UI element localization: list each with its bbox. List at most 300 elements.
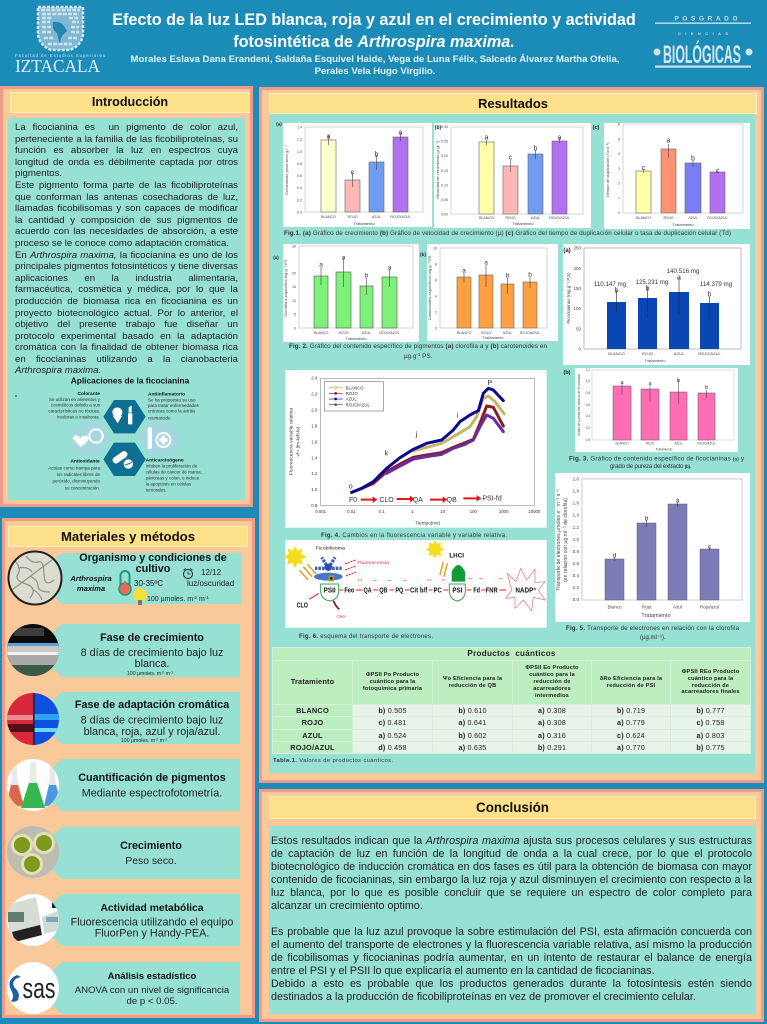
chart: Fig 5 electron transport: [555, 473, 750, 622]
axes: 1.0: [311, 487, 318, 492]
axes: 1000: [499, 509, 509, 514]
text: anticarcinógeno: Anticarcinógeno: [146, 458, 184, 464]
step: Fase de crecimiento: m: [164, 671, 170, 677]
authors: [131, 54, 619, 77]
diagram: Fig 6 electron transport: [283, 540, 547, 628]
step: Fase de adaptación cromática: Fase de adaptación cromática: [75, 699, 230, 711]
chart: Fig 5 electron transport: Transporte de electrones µmoles e⁻ m⁻² s⁻¹: [556, 489, 562, 591]
step: Actividad metabólica: Actividad metabólica: [100, 903, 204, 914]
chart: Fig 2a chlorophyll: b: [365, 272, 369, 280]
table: quantum products: b) 0.505: [378, 706, 407, 715]
chart: Fig 1b growth rate: 0.25: [441, 140, 448, 144]
panel: Conclusión: [259, 789, 764, 1022]
chart: Fig 3a phycocyanin: b: [615, 288, 619, 294]
step: Fase de crecimiento: -1: [170, 670, 173, 674]
text: anticarcinógeno: tumorales.: [146, 488, 167, 493]
chart: Fig 1a growth: Crecimiento peso seco g·l⁻¹: [284, 144, 289, 195]
table: quantum products: ROJO: [302, 718, 323, 727]
electron chain labels: QB: [379, 587, 387, 594]
red arrows: [309, 560, 506, 609]
electron chain labels: FNR: [486, 587, 498, 594]
panel: Materiales y métodos: [2, 518, 255, 1018]
chart: Fig 2a chlorophyll: BLANCO: [314, 331, 329, 335]
chart: Fig 5 electron transport: 0.4: [573, 573, 579, 578]
chart: Fig 2a chlorophyll: AZUL: [362, 331, 371, 335]
teal body: [269, 114, 755, 773]
step: Organismo y condiciones de cultivo: cultivo: [136, 563, 171, 575]
step: Cuantificación de pigmentos: Mediante espectrofotometría.: [82, 788, 222, 800]
table: quantum products: b) 0.719: [617, 706, 645, 715]
bars: [636, 144, 725, 213]
text: anticarcinógeno: páncreas y colon, e induce: [146, 476, 200, 481]
chart: Fig 2a chlorophyll: Clorofila a específica mg.g⁻¹ PS: [283, 259, 288, 317]
axes: Fluorescencia variable relativa: [289, 408, 295, 475]
table: quantum products: b) 0.610: [458, 706, 487, 715]
chart: Fig 5 electron transport: a: [676, 498, 680, 504]
heading: Conclusión: Conclusión: [476, 800, 549, 815]
logo: SAS: sas: [22, 973, 56, 1005]
text: antioxidante: su concentración.: [65, 485, 100, 490]
OJIP labels and sequence: [349, 378, 502, 504]
table: quantum products: reducción de: [533, 679, 571, 685]
chart: Fig 3a phycocyanin: Tratamiento: [644, 358, 666, 363]
PSII: PSII: [324, 587, 336, 594]
heading: Materiales y métodos: [8, 526, 248, 547]
chart: Fig 1a growth: ROJO/AZUL: [390, 215, 411, 219]
bars: [479, 138, 567, 214]
step: Organismo y condiciones de cultivo: m: [197, 596, 205, 603]
chart: Fig 1c doubling time: c: [642, 165, 646, 172]
chart: Fig 1c doubling time: c: [716, 168, 720, 175]
text: introduction: La ficocianina es un pigmento de color azul,: [15, 122, 238, 133]
chart: Fig 3b purity: Grado de pureza del extracto de ficocianina: [577, 374, 581, 436]
step: Organismo y condiciones de cultivo: 100 µmoles. m: [147, 596, 193, 603]
text: antiinflamatorio: crónicas como la artritis: [148, 409, 196, 414]
authors: Perales Vela Hugo Virgilio.: [315, 66, 435, 77]
table: quantum products: a) 0.524: [378, 731, 406, 740]
chart: Fig 1b growth rate: b: [534, 146, 538, 152]
OJIP labels and sequence: i: [457, 410, 459, 419]
step: Organismo y condiciones de cultivo: 30-35ºC: [134, 579, 163, 588]
chart: Fig 1c doubling time: AZUL: [688, 216, 698, 220]
chart: Fig 2a chlorophyll: a: [342, 254, 346, 262]
axes: vf = (fm-fo/ft-fo): [296, 426, 301, 457]
text: colorante: cosméticos debido a sus: [51, 403, 101, 408]
chart: Fig 1c doubling time: 4: [618, 152, 620, 156]
caption: Tabla 1: Tabla.1. Valores de productos cuánticos.: [273, 758, 393, 764]
chart: Fig 1b growth rate: [434, 123, 591, 228]
chart: Fig 3b purity: BLANCO: [615, 442, 629, 446]
chart: Fig 2a chlorophyll: 30: [292, 244, 296, 248]
chart: Fig 2a chlorophyll: 0: [294, 326, 296, 330]
chart: Fig 1a growth: 0.8: [297, 162, 302, 166]
table: quantum products: d) 0.458: [378, 743, 407, 752]
step: Actividad metabólica: Fluorescencia utilizando el equipo: [71, 916, 233, 928]
step: Fase de crecimiento: [5, 622, 240, 678]
table: quantum products: cuántico para la: [370, 679, 415, 685]
chart: Fig 1b growth rate: BLANCO: [479, 216, 494, 220]
axes: 0.01: [347, 509, 356, 514]
heading: Resultados: [269, 93, 757, 114]
step: Fase de adaptación cromática: m: [158, 738, 164, 744]
chart: Fig 3a phycocyanin: ROJO/AZUL: [698, 351, 721, 356]
photo: filters with biomass: [7, 826, 59, 878]
chart: Fig 3a phycocyanin: BLANCO: [608, 351, 625, 356]
text: introduction: pigmentos.: [15, 168, 62, 179]
bars: [457, 265, 537, 328]
heading: Resultados: Resultados: [478, 96, 548, 111]
chart: Fig 5 electron transport: 1.4: [573, 513, 579, 518]
title: [112, 11, 636, 51]
chart: Fig 1a growth: Tratamiento: [353, 221, 375, 226]
step: Fase de adaptación cromática: -1: [164, 738, 167, 742]
caption: Fig 3: grado de pureza del extracto (b).: [610, 463, 691, 470]
chart: Fig 5 electron transport: c: [708, 544, 712, 550]
electron chain labels: Cit b/f: [410, 587, 428, 594]
hexagon: colorant: [103, 400, 146, 433]
table: quantum products: b) 0.775: [696, 743, 725, 752]
icon: suns: [283, 540, 447, 580]
text: introduction: protocolo experimental basado en la adaptación: [15, 331, 238, 342]
step: Fase de crecimiento: -2: [161, 670, 164, 674]
step: Fase de adaptación cromática: blanca, roja, azul y roja/azul.: [84, 726, 220, 738]
step: Crecimiento: Crecimiento: [120, 840, 182, 852]
chart: Fig 3a phycocyanin: 114.379 mg: [700, 281, 733, 288]
axes: 1.6: [311, 439, 318, 444]
caption: Fig 2: µg.g: [404, 353, 416, 360]
electron chain labels: PQ: [395, 587, 404, 594]
bars: [605, 502, 719, 600]
OJIP labels and sequence: o: [349, 481, 353, 490]
text: conclusion: luz blanca, por lo que es posible concluir que se requiere un espectro de color completo para: [271, 887, 752, 899]
chart: Fig 2b carotenoids: [420, 244, 558, 341]
chart: Fig 1b growth rate: AZUL: [531, 216, 540, 220]
chart: Fig 2b carotenoids: b: [528, 272, 532, 278]
teal body: [8, 118, 245, 500]
text: conclusion: alcanzar un crecimiento optimo.: [271, 900, 423, 912]
table: quantum products: reducción de QB: [449, 682, 496, 688]
chart: Fig 5 electron transport: 1.8: [573, 489, 579, 494]
table: quantum products: b) 0.291: [538, 743, 566, 752]
step: Fase de crecimiento: 8 días de crecimiento bajo luz: [81, 647, 223, 659]
step: Fase de adaptación cromática: 100 µmoles. m: [121, 738, 155, 744]
hexagon: anticancer: [103, 443, 146, 476]
chart: Fig 3b purity: ROJO/AZUL: [698, 442, 716, 446]
step: Fase de crecimiento: 100 µmoles. m: [127, 671, 161, 677]
chart: Fig 3b purity: [563, 368, 738, 452]
chart: Fig 2b carotenoids: a: [484, 260, 488, 266]
chart: Fig 1a growth: c: [351, 170, 355, 176]
table: quantum products: ΦPSII REo Producto: [682, 669, 739, 675]
chart: Fig 3b purity: 1.2: [586, 368, 590, 372]
table: quantum products: cuántico para la: [688, 676, 733, 682]
charts and figures: [273, 122, 750, 764]
chart: Fig 3a phycocyanin: 0: [578, 346, 581, 352]
text: conclusion: contenido de ficocianinas, sin embargo la luz roja y azul disminuyen el crecimiento con respecto a la: [271, 874, 752, 886]
heading: Materiales y métodos: Materiales y métodos: [61, 529, 195, 544]
chart: Fig 3b purity: 0.8: [586, 391, 590, 395]
text: introduction: acuerdo con las necesidades de absorción, a este: [15, 226, 238, 237]
chart: Fig 2a chlorophyll: a: [388, 264, 392, 272]
step: Organismo y condiciones de cultivo: Organismo y condiciones de: [79, 552, 227, 564]
chart: Fig 2b carotenoids: 0: [435, 326, 437, 330]
text: conclusion: Estos resultados indican que la Arthrospira maxima ajusta sus procesos celulares y sus estructuras: [271, 835, 752, 847]
table: quantum products: c) 0.481: [378, 718, 406, 727]
chart: Fig 2a chlorophyll: 10: [292, 299, 296, 303]
OJIP labels and sequence: QB: [447, 497, 457, 504]
OJIP labels and sequence: P: [487, 378, 492, 387]
text: antioxidante: peróxido, disminuyendo: [52, 479, 100, 484]
chart: Fig 1c doubling time: 6: [618, 122, 620, 126]
axes: 2.4: [311, 376, 318, 381]
text: introduction: llamadas ficobilisomas y son capaces de modificar: [15, 203, 238, 214]
chart: Fig 2a chlorophyll: ROJO/AZUL: [379, 331, 400, 335]
bars: [314, 258, 397, 328]
chart: Fig 5 electron transport: Blanco: [607, 604, 622, 610]
chart: Fig 3a phycocyanin: 110.147 mg: [594, 281, 627, 288]
chart: Fig 5 electron transport: d: [613, 552, 617, 560]
chart: Fig 3b purity: Tratamiento: [656, 448, 673, 452]
text: conclusion: entre el PSI y el PSII lo que explicaría el aumento en la cantidad de ficocianinas.: [271, 965, 655, 977]
text: introduction: longitud de onda es débilmente captada por otros: [15, 157, 238, 168]
chart: Fig 1b growth rate: 0.30: [441, 125, 448, 129]
chart: Fig 1b growth rate: ROJO: [506, 216, 516, 220]
icon: thermometer: [119, 571, 131, 595]
axes: Tiempo(ms): [415, 520, 440, 525]
text: conclusion: Debido a esto es probable que los productos generados durante la fotosíntesis estén siendo: [271, 978, 752, 990]
table: quantum products: fotoquímica primaria: [363, 686, 422, 692]
text: introduction: farmacéutica, cosmética y médica, por lo que la: [15, 284, 238, 295]
chart: Fig 3a phycocyanin: 50: [576, 326, 581, 331]
legend: ROJO/AZUL: [346, 402, 371, 407]
chart: Fig 3a phycocyanin: 100: [573, 306, 581, 311]
chart: Fig 1a growth: BLANCO: [321, 215, 336, 219]
PSI and LHCI: [449, 552, 465, 601]
table: quantum products: acarreadores finales: [681, 689, 740, 695]
chart: Fig 2a chlorophyll: 20: [292, 272, 296, 276]
table: quantum products: δRo Eficiencia para la: [600, 676, 662, 682]
axes: 0.001: [315, 509, 327, 514]
table: quantum products: a) 0.641: [458, 718, 486, 727]
chart: Fig 1b growth rate: Tratamiento: [512, 221, 534, 226]
caption: Fig 2: [289, 343, 547, 360]
chart: Fig 3a phycocyanin: b: [708, 292, 712, 298]
diagram: Fig 6 electron transport: CLO: [297, 602, 308, 609]
caption: Fig 2: Fig. 2. Gráfico del contenido específico de pigmentos (a) clorofila a y (b) carotenoides en: [289, 343, 547, 350]
logo: SAS: [7, 962, 59, 1014]
chart: Fig 1c doubling time: 2: [618, 182, 620, 186]
caption: Fig 2: PS.: [420, 353, 433, 360]
text: anticarcinógeno: [146, 458, 202, 493]
text: colorante: [48, 391, 101, 420]
text: antioxidante: [48, 459, 100, 490]
chart: Fig 1a growth: [276, 122, 432, 227]
panel: Resultados: [259, 87, 764, 783]
chart: Fig 3a phycocyanin: (a): [563, 248, 571, 254]
step: Organismo y condiciones de cultivo: -1: [205, 595, 209, 600]
caption: Fig 4: Fig. 4. Cambios en la fluorescencia variable y variable relativa.: [321, 533, 507, 539]
authors: Morales Eslava Dana Erandeni, Saldaña Esquivel Haide, Vega de Luna Félix, Salcedo Álvarez Martha Ofelia,: [131, 54, 619, 65]
chart: Fig 1a growth: 0.4: [297, 186, 302, 190]
legend: BLANCO: [346, 385, 364, 390]
icon: light bulb: [133, 588, 147, 605]
photo: microscope: [10, 552, 60, 604]
table: quantum products: c) 0.624: [617, 731, 645, 740]
step: Organismo y condiciones de cultivo: 12/12: [201, 568, 222, 577]
chart: Fig 2b carotenoids: a: [462, 268, 466, 274]
chart: Fig 5 electron transport: 2.0: [573, 476, 579, 482]
chart: Fig 5 electron transport: 1.6: [573, 501, 579, 506]
curves: [352, 388, 504, 492]
text: antiinflamatorio: para tratar enfermedades: [148, 403, 200, 408]
table: quantum products: a) 0.308: [538, 706, 566, 715]
chart: Fig 1a growth: (a): [276, 122, 282, 126]
axes: 2.0: [311, 407, 318, 412]
chart: Fig 2b carotenoids: (b): [420, 252, 426, 257]
chart: Fig 3a phycocyanin: ROJO: [642, 351, 653, 356]
text: anticarcinógeno: Inhiben la proliferación de: [146, 464, 198, 469]
chart: Fig 3a phycocyanin: b: [646, 286, 650, 292]
axes: 0.8: [311, 503, 318, 508]
logo: UNAM Iztacala: [15, 6, 105, 74]
photo: red and blue light: [7, 693, 59, 745]
heading: Conclusión: [269, 796, 756, 819]
chart: Fig 3b purity: b: [705, 385, 708, 391]
title: Efecto de la luz LED blanca, roja y azul en el crecimiento y actividad: [112, 11, 636, 29]
text: colorante: inodoras e insaboras.: [57, 415, 100, 420]
chart: Fig 2a chlorophyll: ROJO: [339, 331, 349, 335]
ficobilisoma: Ficobilisoma: [316, 546, 345, 552]
chart: Fig 1c doubling time: 3: [618, 167, 620, 171]
chart: Fig 5 electron transport: b: [645, 516, 649, 522]
text: antiinflamatorio: Antiinflamatorio: [148, 391, 185, 397]
chart: Fig 3a phycocyanin: 200: [573, 266, 581, 271]
chart: Fig 3a phycocyanin: [563, 244, 750, 365]
step: Organismo y condiciones de cultivo: [8, 551, 242, 605]
step: Actividad metabólica: [5, 892, 240, 948]
table: quantum products: a) 0.803: [697, 731, 725, 740]
caption: Fig 6: Fig. 6. esquema del transporte de electrones.: [299, 634, 433, 640]
infographic: applications of phycocyanin: Aplicaciones de la ficocianina: [71, 375, 190, 385]
table: quantum products: reducción de: [692, 682, 729, 688]
table: quantum products: reducción de PSI: [607, 682, 655, 688]
legend: ROJO: [346, 391, 358, 396]
title: fotosintética de Arthrospira maxima.: [233, 33, 515, 51]
chart: Fig 1b growth rate: c: [509, 154, 513, 162]
table: quantum products: a) 0.308: [538, 718, 566, 727]
chart: Fig 2b carotenoids: ROJO/AZUL: [520, 331, 540, 335]
step: Actividad metabólica: FluorPen y Handy-PEA.: [95, 928, 209, 940]
chart: Fig 1c doubling time: [593, 122, 750, 229]
axes: 1.2: [311, 471, 318, 476]
text: introduction: que conforman las antenas cosechadoras de luz,: [15, 192, 238, 203]
chart: Fig 1b growth rate: ROJO/AZUL: [549, 216, 570, 220]
step: Cuantificación de pigmentos: [5, 757, 240, 813]
chart: Fig 1c doubling time: Tiempo de duplicación (Td d⁻¹): [605, 142, 610, 198]
OJIP labels and sequence: CLO: [379, 497, 394, 504]
chart: Fig 1b growth rate: 0.15: [441, 169, 448, 173]
text: colorante: Colorante: [77, 391, 100, 397]
text: introduction: [14, 122, 238, 376]
text: conclusion: [271, 835, 752, 1003]
chart: Fig 3b purity: 0.4: [586, 414, 590, 418]
chart: Fig 1a growth: AZUL: [372, 215, 381, 219]
text: colorante: características no tóxicas,: [48, 408, 100, 413]
axes: 10000: [528, 509, 541, 514]
chart: Fig 2b carotenoids: 10: [433, 246, 437, 250]
chart: Fig 2b carotenoids: 8: [435, 262, 437, 266]
bars: [607, 278, 719, 349]
chart: Fig 3b purity: 0.2: [586, 426, 590, 430]
step: Fase de adaptación cromática: [5, 690, 240, 748]
table: quantum products: a) 0.779: [617, 718, 645, 727]
diagram: Fig 6 electron transport: Fluorescencia: [357, 560, 389, 566]
axes: 0.1: [379, 509, 385, 514]
panel: Introducción: [0, 86, 253, 507]
chart: Fig 3b purity: b: [677, 378, 680, 384]
chart: Fig 3b purity: (b): [563, 370, 571, 376]
axes: 2.2: [311, 392, 318, 397]
text: colorante: Se utilizan en alimentos y: [49, 397, 101, 402]
hexagon: antioxidant: [68, 422, 111, 455]
chart: Fig 1b growth rate: Velocidad de crecimiento (µ·gl⁻¹): [435, 140, 440, 199]
step: Fase de crecimiento: blanca.: [135, 658, 169, 670]
table: quantum products: c) 0.758: [697, 718, 725, 727]
text: antioxidante: los radicales libres de: [57, 472, 100, 477]
chart: Fig 5 electron transport: 1.2: [573, 525, 579, 530]
table: quantum products: a) 0.635: [458, 743, 486, 752]
PSI and LHCI: LHCI: [449, 552, 464, 559]
step: Organismo y condiciones de cultivo: maxima: [77, 584, 105, 593]
caption: Fig 1: Fig.1. (a) Gráfico de crecimiento (b) Gráfico de velocidad de crecimiento (µ) (c) Gráfico del tiempo de duplicación celular o tasa de duplicación celular (Td): [284, 230, 731, 237]
step: Fase de crecimiento: Fase de crecimiento: [100, 632, 204, 644]
table: quantum products: AZUL: [302, 731, 323, 740]
electron chain labels: Fd: [473, 587, 480, 594]
step: Análisis estadístico: de p < 0.05.: [127, 996, 177, 1007]
text: conclusion: Es probable que la luz azul provoque la sobre estimulación del PSI, esta afirmación concuerda con: [271, 926, 752, 938]
chart: Fig 3b purity: a: [620, 380, 624, 386]
NADP burst: NADP⁺: [515, 588, 537, 595]
OJIP labels and sequence: QA: [413, 497, 423, 504]
text: conclusion: de ficobilisomas y ficocianinas podría aumentar, en un intento de restaurar el balance de energía: [271, 952, 752, 964]
logo: UNAM Iztacala: Facultad de Estudios Superiores: [15, 53, 105, 58]
ficobilisoma: [314, 546, 345, 581]
chart: Fig 1a growth: 0.6: [297, 174, 302, 178]
chart: Fig 3b purity: 1.0: [586, 379, 590, 383]
OJIP labels and sequence: PSI-fd: [482, 496, 502, 503]
text: introduction: Este pigmento forma parte de las ficobiliproteínas: [15, 180, 238, 191]
text: introduction: perteneciente a la familia de las ficobiliproteínas, su: [15, 134, 238, 145]
step: Análisis estadístico: Análisis estadístico: [108, 971, 197, 982]
step: Cuantificación de pigmentos: Cuantificación de pigmentos: [78, 772, 226, 784]
chart: Fig 1a growth: 1.0: [297, 150, 302, 154]
OJIP labels and sequence: k: [385, 449, 389, 458]
legend: [324, 382, 383, 411]
chart: Fig 5 electron transport: Rojo: [642, 604, 652, 610]
step: Análisis estadístico: [7, 962, 240, 1014]
PSII: [321, 584, 339, 601]
method steps: [7, 550, 242, 1014]
electron chain labels: Feo: [344, 587, 354, 594]
axes: 10: [440, 509, 446, 514]
chart: Fig 4 fluorescence curves: [285, 370, 547, 528]
text: introduction: proceso se le conoce como adaptación cromática.: [15, 238, 229, 249]
text: conclusion: el aumento del transporte de electrones y la fluorescencia variable relativa, así mismo la producción: [271, 939, 752, 951]
OJIP labels and sequence: j: [415, 430, 418, 439]
chart: Fig 1a growth: b: [375, 152, 379, 158]
chart: Fig 1c doubling time: 1: [618, 196, 620, 200]
electron chain labels: PC: [434, 587, 442, 594]
